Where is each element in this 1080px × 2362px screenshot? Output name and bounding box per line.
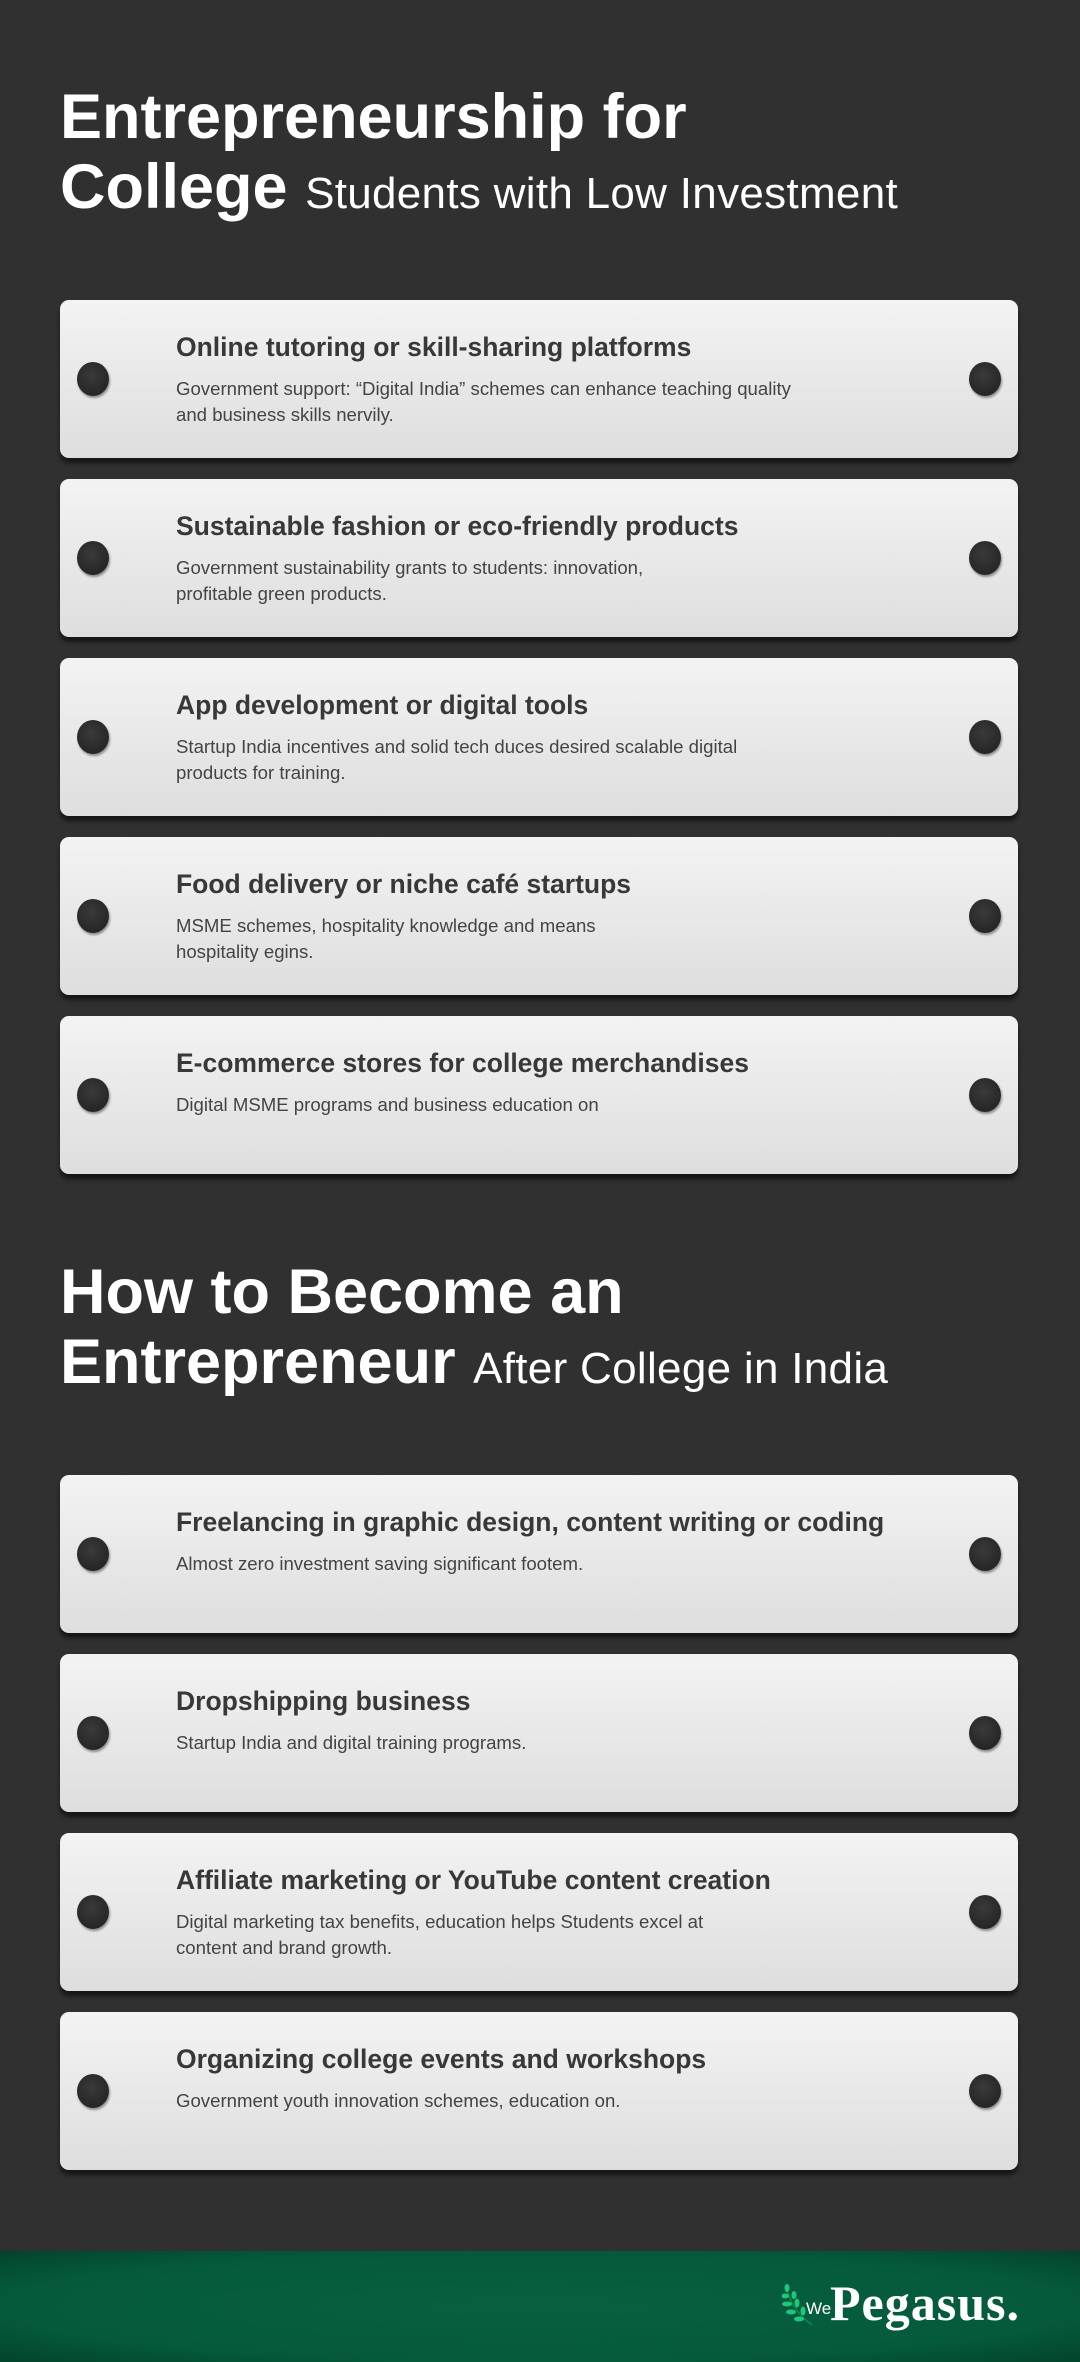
card 4: hospitality egins. <box>176 941 313 962</box>
title: section 2: How to Become an <box>60 1257 624 1327</box>
card 9 <box>60 2012 1018 2170</box>
card 2: Sustainable fashion or eco-friendly products <box>176 511 738 541</box>
footer <box>0 2251 1080 2362</box>
card 1: Government support: “Digital India” schemes can enhance teaching quality <box>176 378 791 399</box>
card 7: Dropshipping business <box>176 1686 470 1716</box>
title: section 1 <box>60 82 898 222</box>
card 2 <box>60 479 1018 637</box>
card 1: and business skills nervily. <box>176 404 394 425</box>
card 1: Online tutoring or skill-sharing platforms <box>176 332 691 362</box>
card 7 <box>60 1654 1018 1812</box>
card 8 <box>60 1833 1018 1991</box>
card 5: E-commerce stores for college merchandises <box>176 1048 749 1078</box>
card 6: Freelancing in graphic design, content writing or coding <box>176 1507 884 1537</box>
card 9: Organizing college events and workshops <box>176 2044 706 2074</box>
icon: leaf <box>782 2284 812 2326</box>
title: section 1: College Students with Low Investment <box>60 152 898 222</box>
logo: We <box>806 2299 831 2318</box>
card 7: Startup India and digital training programs. <box>176 1732 526 1753</box>
card 4: Food delivery or niche café startups <box>176 869 631 899</box>
card 3: products for training. <box>176 762 346 783</box>
card 2: Government sustainability grants to students: innovation, <box>176 557 643 578</box>
title: section 2: Entrepreneur After College in India <box>60 1327 888 1397</box>
card 8: Digital marketing tax benefits, education helps Students excel at <box>176 1911 703 1932</box>
card 5: Digital MSME programs and business education on <box>176 1094 599 1115</box>
card 4 <box>60 837 1018 995</box>
card 9: Government youth innovation schemes, education on. <box>176 2090 620 2111</box>
card 8: content and brand growth. <box>176 1937 392 1958</box>
card 6 <box>60 1475 1018 1633</box>
card 1 <box>60 300 1018 458</box>
title: section 1: Entrepreneurship for <box>60 82 687 152</box>
card 2: profitable green products. <box>176 583 387 604</box>
card 3 <box>60 658 1018 816</box>
title: section 2 <box>60 1257 888 1397</box>
logo: Pegasus. <box>830 2275 1020 2331</box>
card 8: Affiliate marketing or YouTube content creation <box>176 1865 771 1895</box>
card 3: App development or digital tools <box>176 690 588 720</box>
card 6: Almost zero investment saving significant footem. <box>176 1553 583 1574</box>
card 3: Startup India incentives and solid tech duces desired scalable digital <box>176 736 737 757</box>
card 4: MSME schemes, hospitality knowledge and means <box>176 915 596 936</box>
card 5 <box>60 1016 1018 1174</box>
